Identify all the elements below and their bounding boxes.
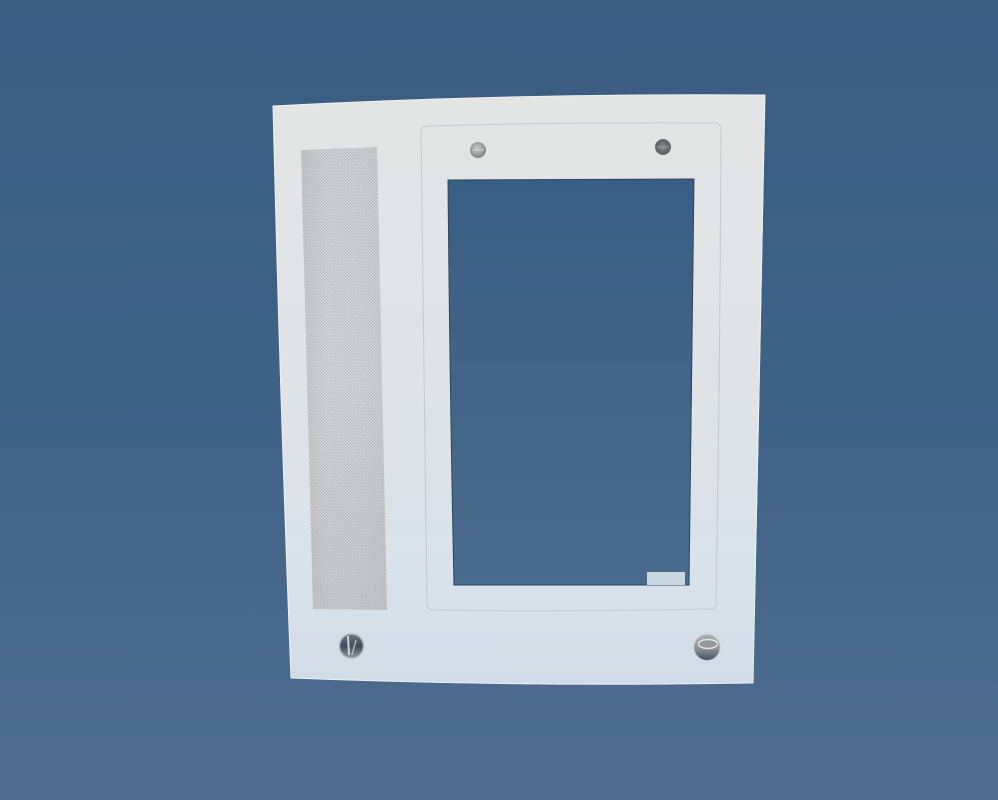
frame: recessed inner outline (421, 123, 721, 611)
panel: perforated speaker grille (301, 147, 387, 610)
icon: bottom right knob (694, 634, 720, 660)
tab: small white clip in cutout (647, 572, 685, 585)
icon: bottom left knob (340, 634, 364, 658)
window: rectangular cutout (448, 179, 694, 585)
icon: top left screw (470, 142, 486, 158)
icon: top right screw (655, 139, 671, 155)
panel: white faceplate (273, 95, 765, 684)
